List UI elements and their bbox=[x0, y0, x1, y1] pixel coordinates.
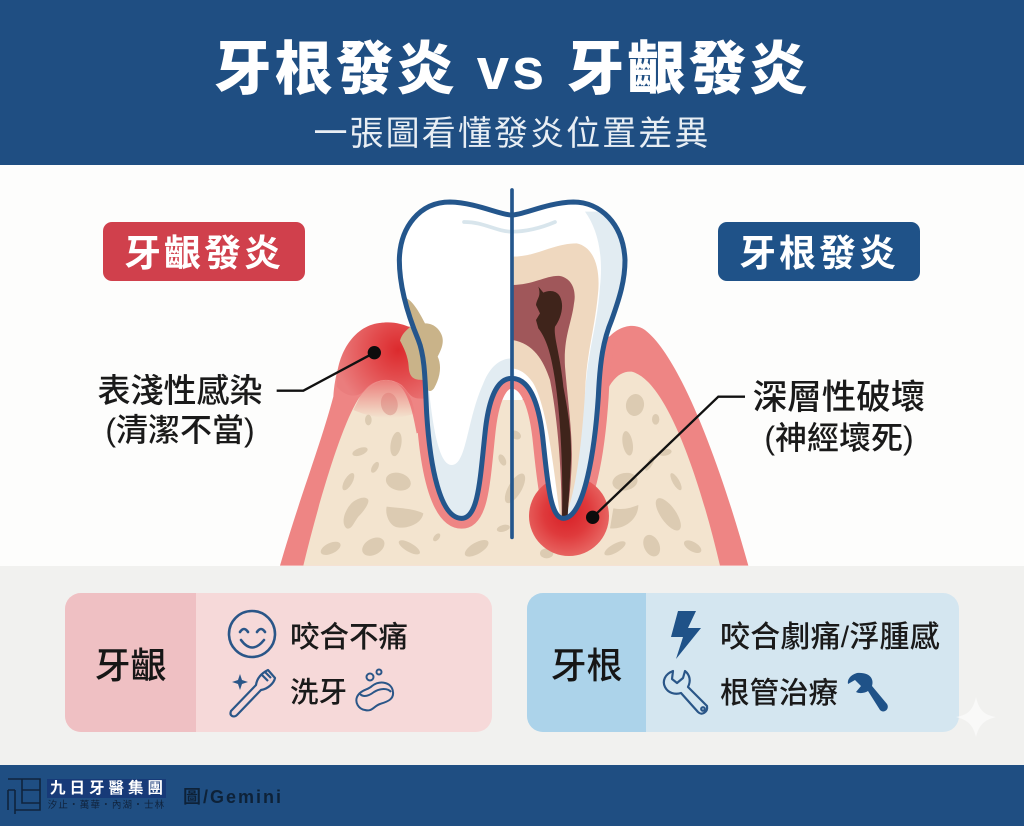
brand name: 九日牙醫集團 bbox=[50, 780, 167, 797]
text: no bite pain: 咬合不痛 bbox=[290, 621, 408, 654]
icon: sparkle bbox=[232, 674, 248, 690]
icon: wrench outline bbox=[664, 671, 707, 714]
bone pores bbox=[319, 391, 703, 560]
footer band bbox=[0, 765, 1024, 826]
card header: gum: 牙齦 bbox=[94, 645, 166, 686]
icon: soap bbox=[356, 670, 393, 710]
card header: gum bbox=[65, 593, 196, 732]
right leader line bbox=[586, 397, 745, 524]
tooth outline bbox=[399, 202, 625, 518]
branch locations: 汐止・萬華・內湖・士林 bbox=[48, 800, 165, 811]
label: deep destruction: 深層性破壞 bbox=[753, 379, 925, 417]
tooth and gum illustration bbox=[276, 188, 748, 566]
title: 牙根發炎 vs 牙齦發炎 bbox=[214, 37, 810, 102]
icon: toothbrush bbox=[231, 670, 275, 716]
right abscess bbox=[529, 476, 609, 556]
tooth fill bbox=[399, 202, 625, 518]
image credit: 圖/Gemini bbox=[183, 787, 283, 807]
gum band around roots bbox=[418, 320, 612, 518]
center divider bbox=[506, 190, 517, 537]
label: superficial infection: (清潔不當) bbox=[105, 412, 255, 448]
icon: star watermark bbox=[956, 697, 996, 737]
icon: wrench solid bbox=[848, 673, 888, 711]
bottom section background bbox=[0, 566, 1024, 765]
badge: gum inflammation: 牙齦發炎 bbox=[124, 233, 284, 274]
text: severe bite pain: 咬合劇痛/浮腫感 bbox=[720, 621, 940, 654]
label: superficial infection bbox=[98, 372, 262, 448]
left leader line bbox=[277, 346, 381, 391]
text: root canal: 根管治療 bbox=[720, 677, 838, 710]
subtitle: 一張圖看懂發炎位置差異 bbox=[313, 115, 711, 153]
card header: root: 牙根 bbox=[550, 645, 622, 686]
right half tooth layers bbox=[514, 212, 622, 516]
left abscess bbox=[337, 322, 427, 418]
icon: lightning bolt bbox=[671, 611, 701, 659]
label: superficial infection: 表淺性感染 bbox=[98, 372, 262, 409]
logo mark bbox=[7, 778, 41, 814]
tartar bbox=[400, 298, 443, 391]
header band bbox=[0, 0, 1024, 165]
label: deep destruction bbox=[753, 379, 925, 456]
jaw bone bbox=[303, 372, 720, 566]
crown highlight bbox=[464, 222, 555, 232]
card header: root bbox=[527, 593, 646, 732]
text: cleaning: 洗牙 bbox=[290, 677, 347, 709]
card: root bbox=[527, 593, 959, 732]
left root inner shading bbox=[428, 358, 510, 516]
badge: root inflammation bbox=[718, 222, 920, 281]
card: gum bbox=[65, 593, 492, 732]
badge: root inflammation: 牙根發炎 bbox=[739, 233, 899, 274]
label: deep destruction: (神經壞死) bbox=[764, 420, 914, 456]
badge: gum inflammation bbox=[103, 222, 305, 281]
icon: smiley bbox=[229, 611, 275, 657]
gum bbox=[280, 323, 748, 566]
